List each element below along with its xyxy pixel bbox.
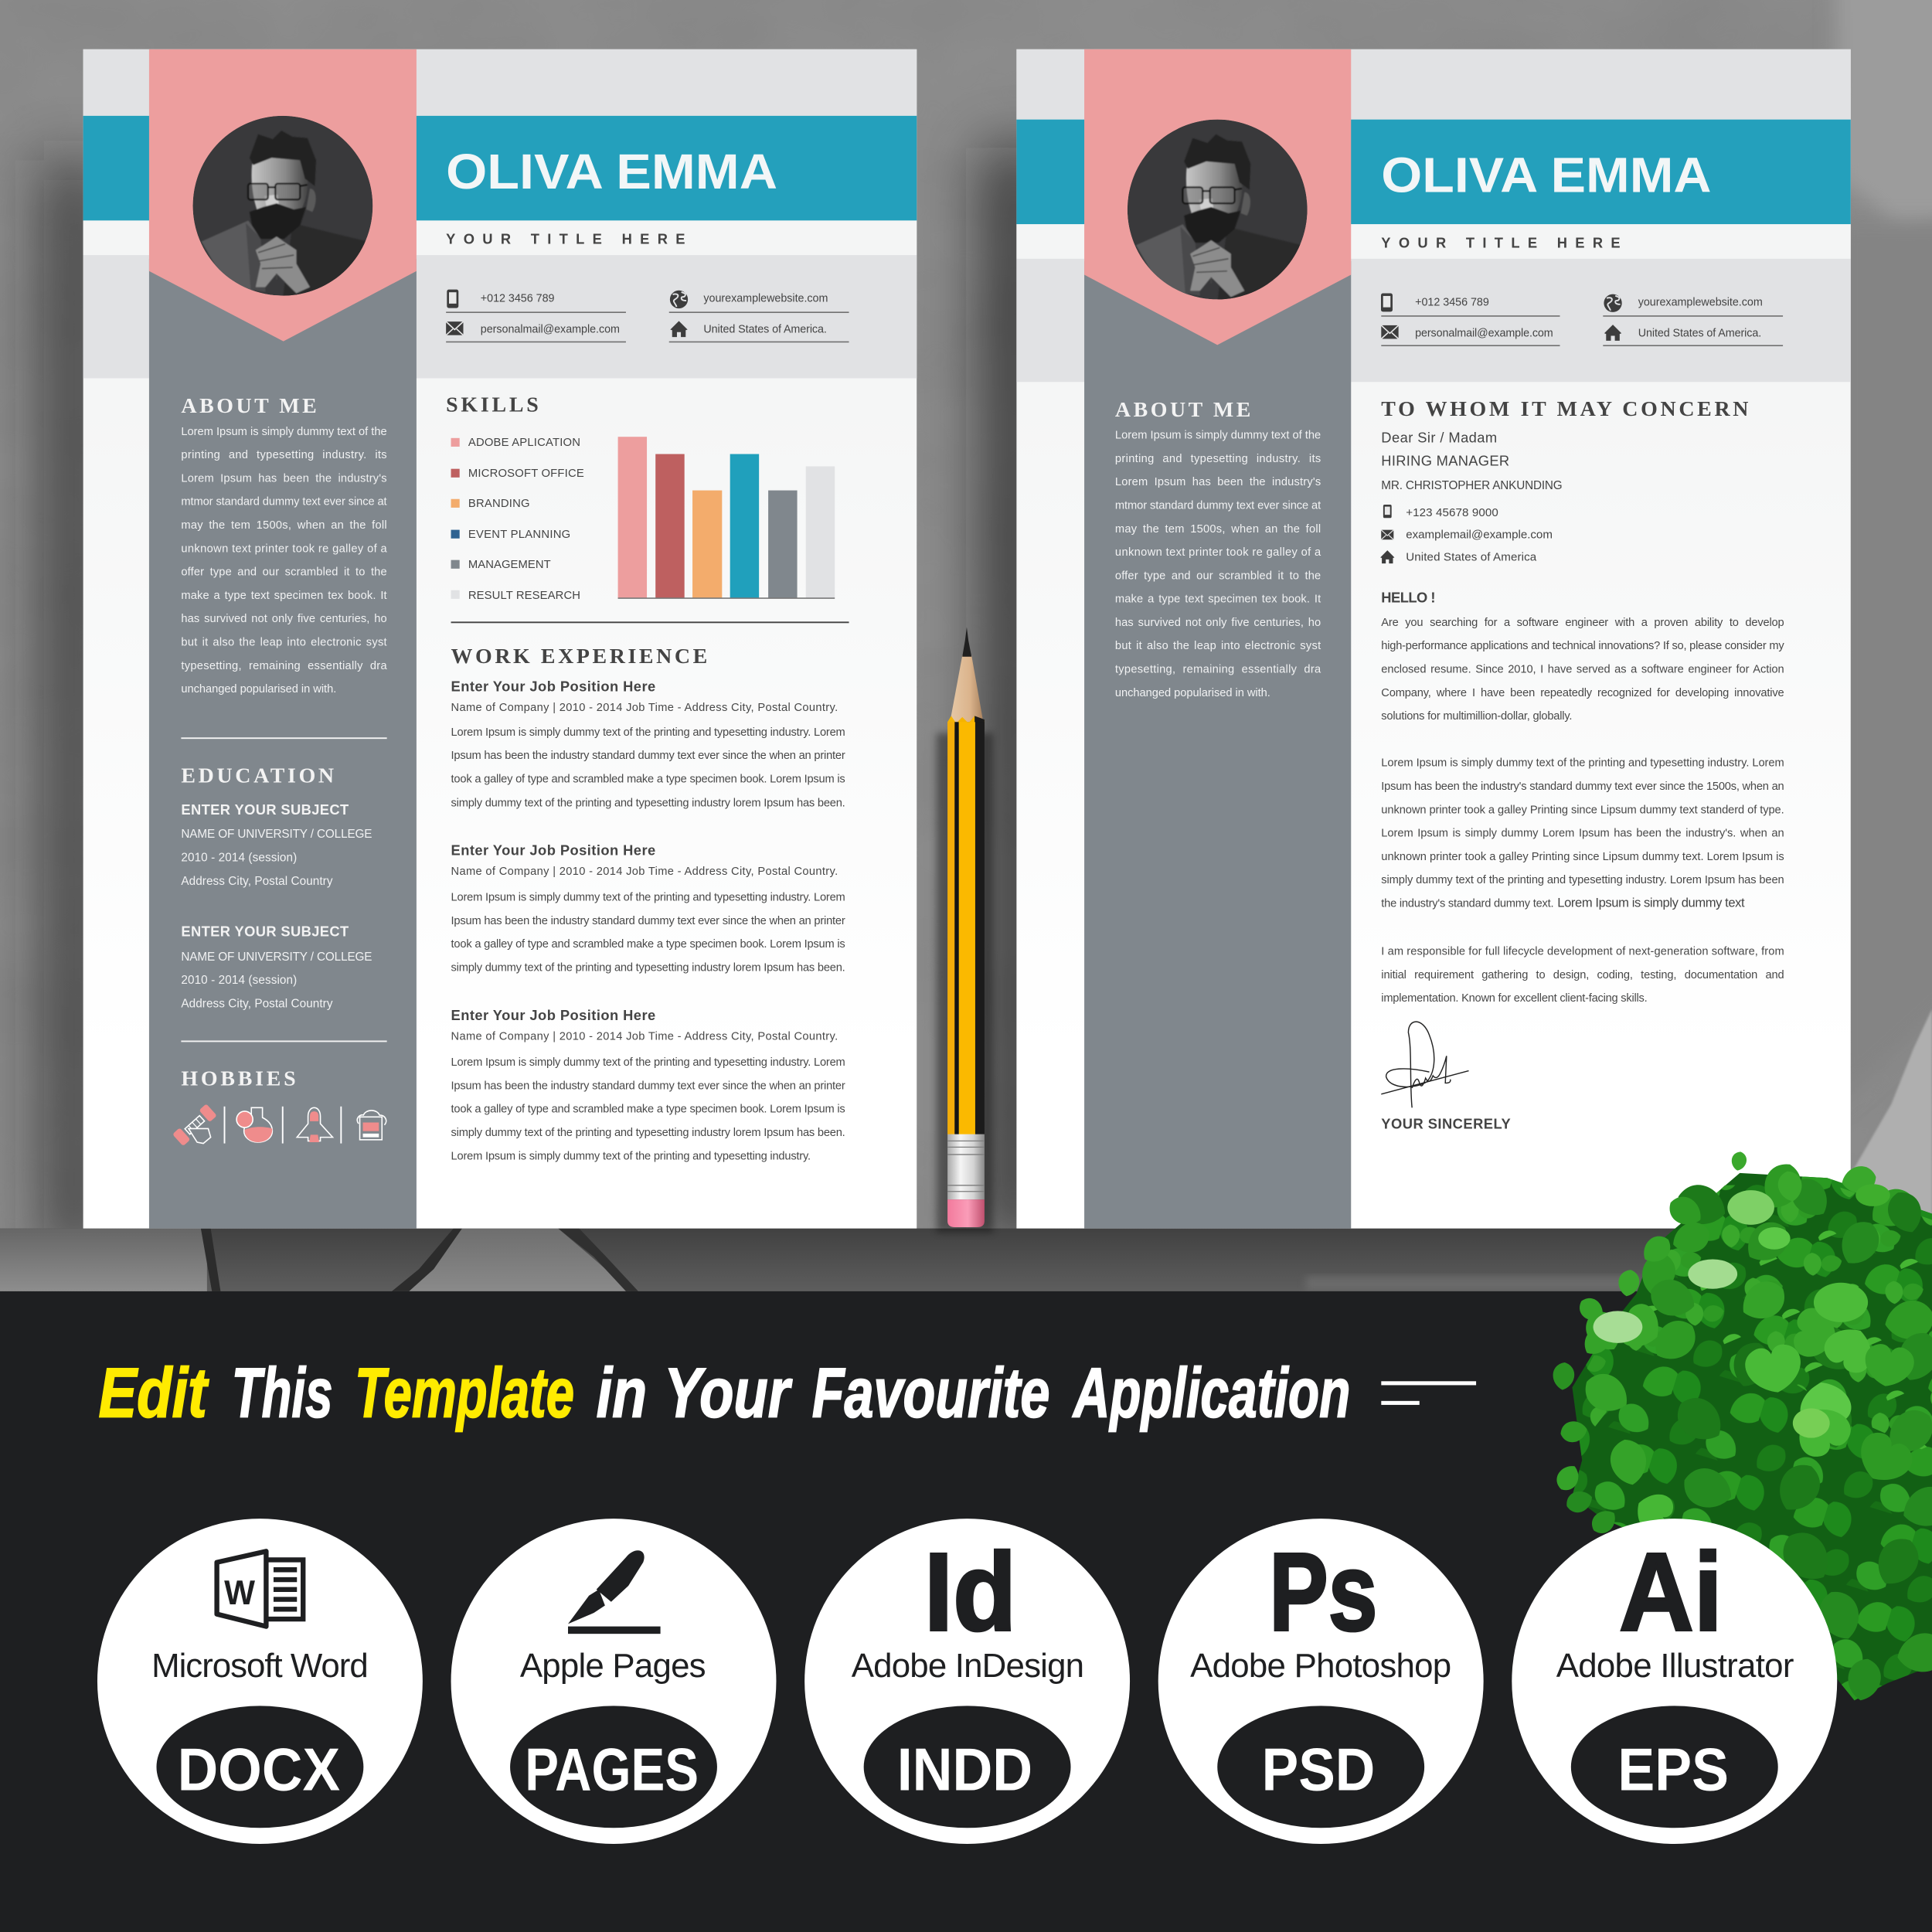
letter about me text: typesetting, remaining essentially dra — [1115, 664, 1321, 676]
badge: Apple Pages: Apple Pages — [520, 1647, 706, 1685]
letter paragraph 3 — [1381, 946, 1784, 1005]
letter paragraph 3: initial requirement gathering to design, coding, testing, documentation and — [1381, 969, 1784, 981]
signature — [1381, 1022, 1469, 1107]
letter contact details: personalmail@example.com — [1415, 327, 1553, 339]
job entry 1: Lorem Ipsum is simply dummy text of the printing and typesetting industry. Lorem — [451, 726, 845, 739]
portrait photo — [193, 116, 372, 298]
badge: Adobe Illustrator: EPS — [1617, 1736, 1729, 1804]
letter about me text: may the tem 1500s, when an the foll — [1115, 523, 1321, 536]
about me text: Lorem Ipsum has been the industry's — [181, 472, 387, 485]
letter sidebar column — [1084, 261, 1351, 1229]
letter paragraph 2: Lorem Ipsum is simply dummy text of the printing and typesetting industry. Lorem — [1381, 757, 1784, 770]
badge: Microsoft Word: DOCX — [178, 1736, 340, 1804]
image: green plant — [1552, 1151, 1932, 1703]
job entry 1: took a galley of type and scrambled make a type specimen book. Lorem Ipsum is — [451, 773, 845, 785]
job entry 2: Ipsum has been the industry standard dummy text ever since the when an printer — [451, 915, 845, 927]
headline: Template — [355, 1355, 574, 1433]
lower band with watercolor marks — [0, 1229, 1932, 1293]
contact details: yourexamplewebsite.com — [703, 293, 828, 305]
contact details — [446, 290, 849, 342]
job entry 1: Ipsum has been the industry standard dummy text ever since the when an printer — [451, 750, 845, 762]
letter paragraph 1 — [1381, 617, 1784, 723]
letter paragraph 2: simply dummy text of the printing and typesetting industry. Lorem Ipsum has been — [1381, 874, 1784, 886]
education list: ENTER YOUR SUBJECT — [181, 801, 349, 818]
job entry 1: simply dummy text of the printing and typesetting industry lorem Ipsum has been. — [451, 798, 845, 810]
job entry 3: simply dummy text of the printing and typesetting industry lorem Ipsum has been. — [451, 1127, 845, 1139]
letter paragraph 1: high-performance applications and technical innovations? If so, please consider my — [1381, 640, 1784, 652]
headline: in — [597, 1355, 647, 1433]
name: OLIVA EMMA — [446, 144, 777, 199]
work experience heading: WORK EXPERIENCE — [451, 645, 707, 668]
letter job title: YOUR TITLE HERE — [1381, 234, 1621, 250]
hobbies heading: HOBBIES — [181, 1067, 296, 1091]
job entry 2: took a galley of type and scrambled make a type specimen book. Lorem Ipsum is — [451, 938, 845, 951]
letter paragraph 2: unknown printer took a galley Printing since Lipsum dummy text standerd of type. — [1381, 804, 1784, 816]
letter paragraph 3: implementation. Known for excellent client-facing skills. — [1381, 992, 1648, 1005]
panel: cover letter page — [1016, 49, 1851, 1229]
letter about me heading: ABOUT ME — [1115, 398, 1250, 422]
badge: Adobe Illustrator: Ai — [1619, 1530, 1723, 1654]
headline: Favourite — [812, 1355, 1049, 1433]
letter paragraph 2: unknown printer took a galley Printing since Lipsum dummy text. Lorem Ipsum is — [1381, 851, 1784, 863]
icon: pencil — [937, 628, 993, 1232]
letter about me text: unchanged popularised in with. — [1115, 687, 1270, 699]
letter about me text: has survived not only five centuries, ho — [1115, 617, 1321, 629]
letter paper — [1016, 49, 1851, 1229]
letter pink ribbon — [1084, 49, 1351, 345]
skills legend: EVENT PLANNING — [468, 529, 570, 541]
badge: Adobe InDesign — [804, 1519, 1130, 1844]
letter paragraph 1: Company, where I have been repeatedly recognized for developing innovative — [1381, 687, 1784, 699]
education list: ENTER YOUR SUBJECT — [181, 923, 349, 940]
education list: Address City, Postal Country — [181, 875, 333, 888]
about me text: unknown text printer took re galley of a — [181, 543, 387, 555]
letter paragraph 2: Ipsum has been the industry's standard dummy text ever since the 1500s, when an — [1381, 781, 1784, 793]
about me text: printing and typesetting industry. its — [181, 449, 387, 461]
about me text: offer type and our scrambled it to the — [181, 566, 387, 579]
badge: Adobe Photoshop — [1158, 1519, 1484, 1844]
letter paragraph 2: Lorem Ipsum is simply dummy text — [1557, 895, 1745, 910]
job entry 3 — [451, 1007, 845, 1162]
badge: Microsoft Word — [97, 1519, 423, 1844]
hobby icons — [172, 1104, 386, 1158]
letter about me text: unknown text printer took re galley of a — [1115, 546, 1321, 559]
icon: pen — [568, 1550, 661, 1634]
job entry 3: Name of Company | 2010 - 2014 Job Time - Address City, Postal Country. — [451, 1031, 838, 1043]
job entry 1: Name of Company | 2010 - 2014 Job Time - Address City, Postal Country. — [451, 702, 838, 714]
letter paragraph 2: Lorem Ipsum is simply dummy Lorem Ipsum has been the industry's. when an — [1381, 828, 1784, 840]
letter contact details: United States of America. — [1638, 327, 1761, 339]
letter greeting: HELLO ! — [1381, 590, 1435, 606]
about me text: Lorem Ipsum is simply dummy text of the — [181, 426, 387, 438]
skills legend: BRANDING — [468, 498, 530, 510]
skills legend: RESULT RESEARCH — [468, 590, 580, 602]
education list — [181, 801, 372, 1010]
letter paragraph 2 — [1381, 757, 1784, 910]
letter contact details — [1381, 293, 1783, 346]
letter about me text: Lorem Ipsum is simply dummy text of the — [1115, 430, 1321, 442]
about me text: but it also the leap into electronic syst — [181, 636, 387, 648]
recipient block: +123 45678 9000 — [1406, 506, 1498, 519]
letter about me text — [1115, 430, 1321, 699]
letter about me text: but it also the leap into electronic syst — [1115, 640, 1321, 652]
headline: Application — [1072, 1355, 1350, 1433]
job entry 3: Lorem Ipsum is simply dummy text of the printing and typesetting industry. — [451, 1150, 811, 1162]
education heading: EDUCATION — [181, 764, 334, 787]
dark footer band — [0, 1291, 1932, 1932]
about me text: mtmor standard dummy text ever since at — [181, 496, 387, 509]
contact details: +012 3456 789 — [481, 293, 555, 305]
icon: word document — [217, 1551, 303, 1627]
headline: Your — [664, 1355, 793, 1433]
job entry 3: Ipsum has been the industry standard dummy text ever since the when an printer — [451, 1080, 845, 1092]
education list: 2010 - 2014 (session) — [181, 851, 297, 864]
badge: Adobe Illustrator: Adobe Illustrator — [1556, 1647, 1794, 1685]
skills legend: MANAGEMENT — [468, 559, 551, 571]
about me text: typesetting, remaining essentially dra — [181, 660, 387, 672]
letter contact details: yourexamplewebsite.com — [1638, 296, 1763, 308]
job title: YOUR TITLE HERE — [446, 231, 685, 247]
job entry 1 — [451, 678, 845, 810]
contact details: United States of America. — [703, 323, 827, 335]
education list: NAME OF UNIVERSITY / COLLEGE — [181, 828, 372, 841]
recipient block — [1380, 429, 1563, 563]
letter contact details: +012 3456 789 — [1415, 296, 1489, 308]
closing: YOUR SINCERELY — [1381, 1115, 1511, 1131]
contact details: personalmail@example.com — [481, 323, 620, 335]
letter about me text: Lorem Ipsum has been the industry's — [1115, 476, 1321, 488]
recipient block: United States of America — [1406, 550, 1537, 563]
job entry 3: Enter Your Job Position Here — [451, 1007, 655, 1023]
recipient block: HIRING MANAGER — [1381, 453, 1509, 469]
badge: Adobe Photoshop: Adobe Photoshop — [1190, 1647, 1451, 1685]
badge: Adobe InDesign: Id — [924, 1530, 1016, 1654]
job entry 2 — [451, 842, 845, 974]
background: grey concrete surface — [0, 0, 1932, 1294]
letter about me text: mtmor standard dummy text ever since at — [1115, 499, 1321, 512]
letter paragraph 2: the industry's standard dummy text. — [1381, 897, 1554, 910]
skills legend: ADOBE APLICATION — [468, 437, 580, 449]
job entry 1: Enter Your Job Position Here — [451, 678, 655, 694]
job entry 3: Lorem Ipsum is simply dummy text of the printing and typesetting industry. Lorem — [451, 1056, 845, 1069]
letter heading: TO WHOM IT MAY CONCERN — [1381, 397, 1748, 421]
badge: Microsoft Word: Microsoft Word — [151, 1647, 369, 1685]
headline: Edit — [99, 1355, 209, 1433]
letter paragraph 1: solutions for multimillion-dollar, globally. — [1381, 710, 1572, 723]
badge: Adobe Photoshop: Ps — [1269, 1530, 1378, 1654]
letter about me text: make a type text specimen tex book. It — [1115, 594, 1321, 606]
job entry 2: Enter Your Job Position Here — [451, 842, 655, 859]
skills bar chart — [618, 437, 835, 599]
skills heading: SKILLS — [446, 393, 539, 417]
letter name: OLIVA EMMA — [1381, 148, 1712, 203]
about me text: has survived not only five centuries, ho — [181, 613, 387, 625]
letter paragraph 1: Are you searching for a software engineer with a proven ability to develop — [1381, 617, 1784, 629]
badge: Apple Pages — [451, 1519, 776, 1844]
resume paper — [83, 49, 917, 1229]
education list: Address City, Postal Country — [181, 997, 333, 1010]
job entry 2: Lorem Ipsum is simply dummy text of the printing and typesetting industry. Lorem — [451, 891, 845, 903]
skills legend — [451, 437, 584, 602]
recipient block: Dear Sir / Madam — [1381, 429, 1497, 445]
about me heading: ABOUT ME — [181, 394, 317, 418]
about me text — [181, 426, 387, 696]
letter portrait photo — [1128, 120, 1308, 302]
headline: This — [232, 1355, 332, 1433]
education list: NAME OF UNIVERSITY / COLLEGE — [181, 951, 372, 964]
about me text: unchanged popularised in with. — [181, 683, 336, 696]
job entry 2: simply dummy text of the printing and typesetting industry lorem Ipsum has been. — [451, 961, 845, 974]
badge: Adobe InDesign: INDD — [897, 1736, 1032, 1804]
icon: word document: W — [224, 1574, 256, 1612]
letter paragraph 1: enclosed resume. Since 2010, I have served as a software engineer for Action — [1381, 664, 1784, 676]
recipient block: examplemail@example.com — [1406, 529, 1553, 542]
education list: 2010 - 2014 (session) — [181, 974, 297, 987]
job entry 3: took a galley of type and scrambled make a type specimen book. Lorem Ipsum is — [451, 1104, 845, 1116]
badge: Adobe Illustrator — [1512, 1519, 1837, 1844]
badge: Adobe InDesign: Adobe InDesign — [852, 1647, 1084, 1685]
panel: resume page — [83, 49, 917, 1229]
job entry 2: Name of Company | 2010 - 2014 Job Time - Address City, Postal Country. — [451, 866, 838, 878]
letter paragraph 3: I am responsible for full lifecycle development of next-generation software, from — [1381, 946, 1784, 958]
about me text: make a type text specimen tex book. It — [181, 590, 387, 602]
badge: Apple Pages: PAGES — [525, 1736, 699, 1804]
sidebar column — [149, 259, 417, 1229]
pink ribbon — [149, 49, 417, 342]
badge: Adobe Photoshop: PSD — [1262, 1736, 1375, 1804]
letter about me text: offer type and our scrambled it to the — [1115, 570, 1321, 582]
letter about me text: printing and typesetting industry. its — [1115, 453, 1321, 465]
skills legend: MICROSOFT OFFICE — [468, 468, 584, 480]
recipient block: MR. CHRISTOPHER ANKUNDING — [1381, 479, 1563, 492]
about me text: may the tem 1500s, when an the foll — [181, 519, 387, 532]
headline — [99, 1355, 1476, 1433]
